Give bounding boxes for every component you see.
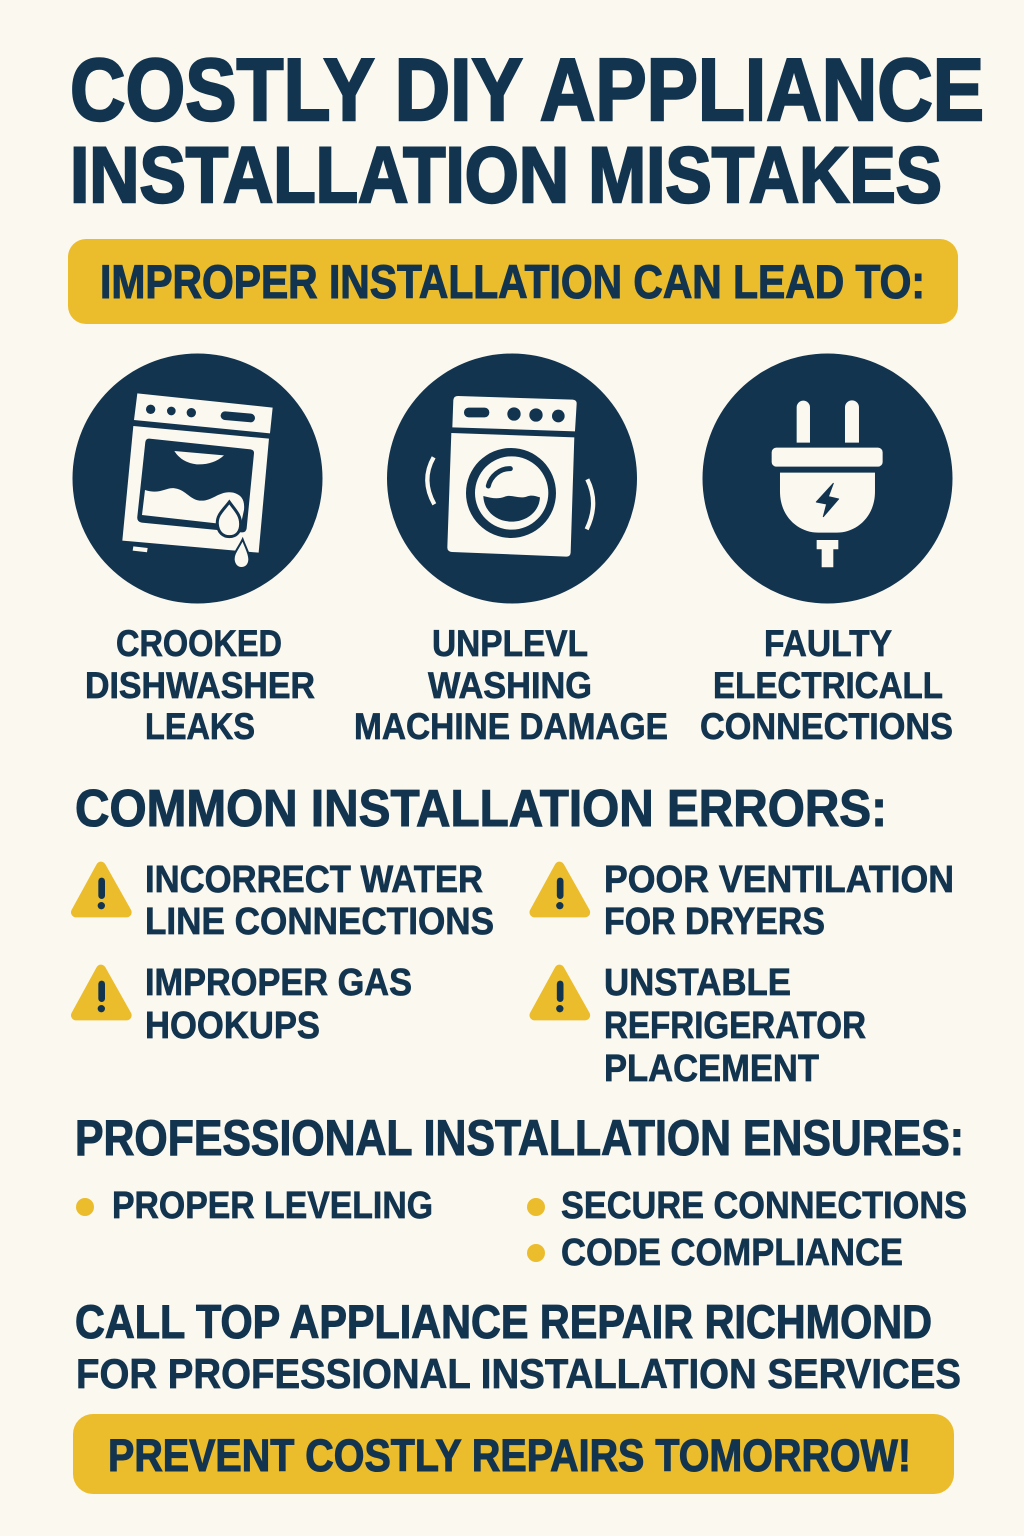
label: faulty electrical connections bbox=[700, 623, 953, 747]
label: faulty electrical connections: ELECTRICALL bbox=[713, 665, 943, 706]
label: unlevel washing machine damage: MACHINE DAMAGE bbox=[354, 706, 668, 747]
banner: improper installation can lead to bbox=[68, 239, 958, 324]
error item: refrigerator placement bbox=[534, 962, 866, 1090]
icon: electrical plug bbox=[702, 354, 952, 604]
bullet: proper leveling: PROPER LEVELING bbox=[112, 1185, 433, 1227]
error item: refrigerator placement: UNSTABLE bbox=[604, 962, 791, 1004]
bullet: secure connections: SECURE CONNECTIONS bbox=[561, 1185, 967, 1227]
banner: improper installation can lead to: IMPROPER INSTALLATION CAN LEAD TO: bbox=[100, 255, 925, 308]
error item: dryer ventilation: FOR DRYERS bbox=[604, 901, 825, 943]
call to action text: CALL TOP APPLIANCE REPAIR RICHMOND bbox=[75, 1295, 932, 1348]
title bbox=[70, 40, 984, 219]
error item: refrigerator placement: PLACEMENT bbox=[604, 1048, 819, 1090]
icon: unlevel washing machine bbox=[387, 354, 637, 604]
label: unlevel washing machine damage: UNPLEVL bbox=[432, 623, 588, 664]
error item: dryer ventilation: POOR VENTILATION bbox=[604, 859, 954, 901]
icon: warning triangle bbox=[76, 970, 127, 1015]
bullet: code compliance: CODE COMPLIANCE bbox=[561, 1232, 903, 1274]
label: unlevel washing machine damage: WASHING bbox=[428, 665, 592, 706]
icon: warning triangle bbox=[76, 867, 127, 912]
label: crooked dishwasher leaks: CROOKED bbox=[116, 623, 282, 664]
label: faulty electrical connections: CONNECTIONS bbox=[700, 706, 953, 747]
error item: refrigerator placement: REFRIGERATOR bbox=[604, 1005, 866, 1047]
error item: gas hookups bbox=[76, 962, 412, 1047]
error item: water line connections: LINE CONNECTIONS bbox=[145, 901, 494, 943]
banner: prevent costly repairs tomorrow: PREVENT COSTLY REPAIRS TOMORROW! bbox=[108, 1430, 911, 1481]
call to action text: FOR PROFESSIONAL INSTALLATION SERVICES bbox=[76, 1350, 961, 1397]
label: faulty electrical connections: FAULTY bbox=[764, 623, 892, 664]
label: crooked dishwasher leaks bbox=[85, 623, 315, 747]
label: unlevel washing machine damage bbox=[354, 623, 668, 747]
label: crooked dishwasher leaks: LEAKS bbox=[145, 706, 255, 747]
icon: warning triangle bbox=[534, 970, 585, 1015]
heading: common installation errors: COMMON INSTALLATION ERRORS: bbox=[75, 780, 887, 838]
error item: gas hookups: IMPROPER GAS bbox=[145, 962, 412, 1004]
error item: gas hookups: HOOKUPS bbox=[145, 1005, 320, 1047]
call to action text bbox=[75, 1295, 961, 1397]
error item: dryer ventilation bbox=[534, 859, 954, 943]
error item: water line connections: INCORRECT WATER bbox=[145, 859, 483, 901]
icon: warning triangle bbox=[534, 867, 585, 912]
error item: water line connections bbox=[76, 859, 494, 943]
banner: prevent costly repairs tomorrow bbox=[73, 1414, 954, 1494]
icon: leaking dishwasher bbox=[72, 354, 322, 604]
label: crooked dishwasher leaks: DISHWASHER bbox=[85, 665, 315, 706]
